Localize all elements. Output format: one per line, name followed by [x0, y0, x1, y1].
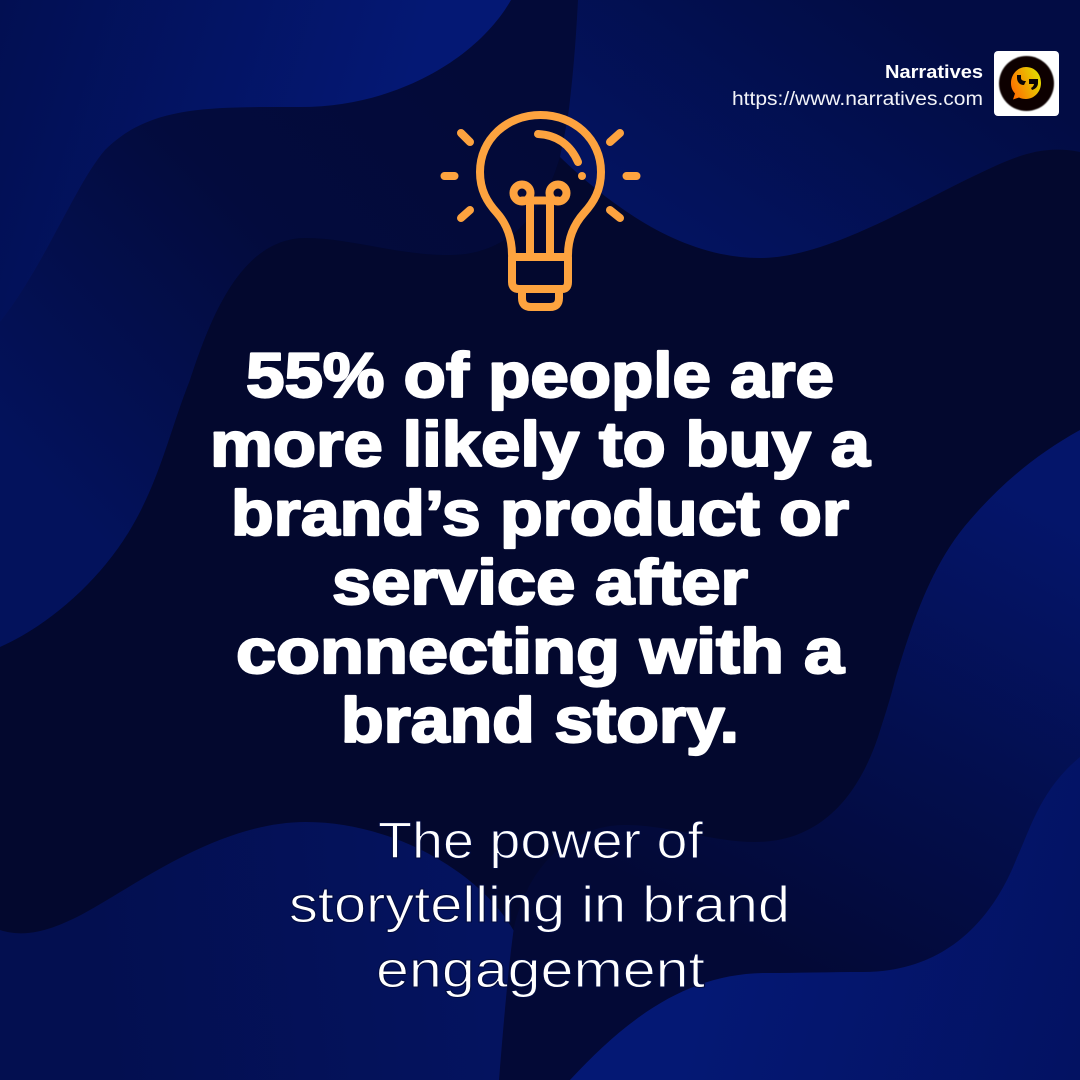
headline: service after — [332, 548, 748, 618]
background: bottom-right blue wave — [570, 757, 1080, 1080]
bulb base — [512, 257, 568, 307]
icon: brand logo — [994, 51, 1059, 116]
background: top-left blue wave — [0, 0, 511, 322]
icon: light bulb — [444, 115, 636, 307]
subtitle — [289, 812, 790, 998]
subtitle: The power of — [378, 812, 704, 869]
headline: 55% of people are — [246, 341, 834, 411]
headline: connecting with a — [236, 617, 845, 687]
brand url: https://www.narratives.com — [732, 89, 983, 110]
headline — [210, 341, 871, 756]
background: right navy wave — [499, 430, 1080, 1080]
background: top-right blue wave — [560, 0, 1080, 258]
headline: more likely to buy a — [210, 410, 871, 480]
bulb glass — [480, 115, 601, 255]
light rays — [444, 133, 636, 218]
subtitle: storytelling in brand — [289, 876, 790, 933]
subtitle: engagement — [376, 941, 705, 998]
headline: brand’s product or — [231, 479, 849, 549]
brand header — [732, 62, 983, 110]
background: bottom-left blue wave — [0, 822, 515, 1080]
headline: brand story. — [341, 686, 739, 756]
filament — [522, 200, 558, 256]
brand name: Narratives — [885, 62, 983, 82]
highlight — [538, 134, 578, 162]
